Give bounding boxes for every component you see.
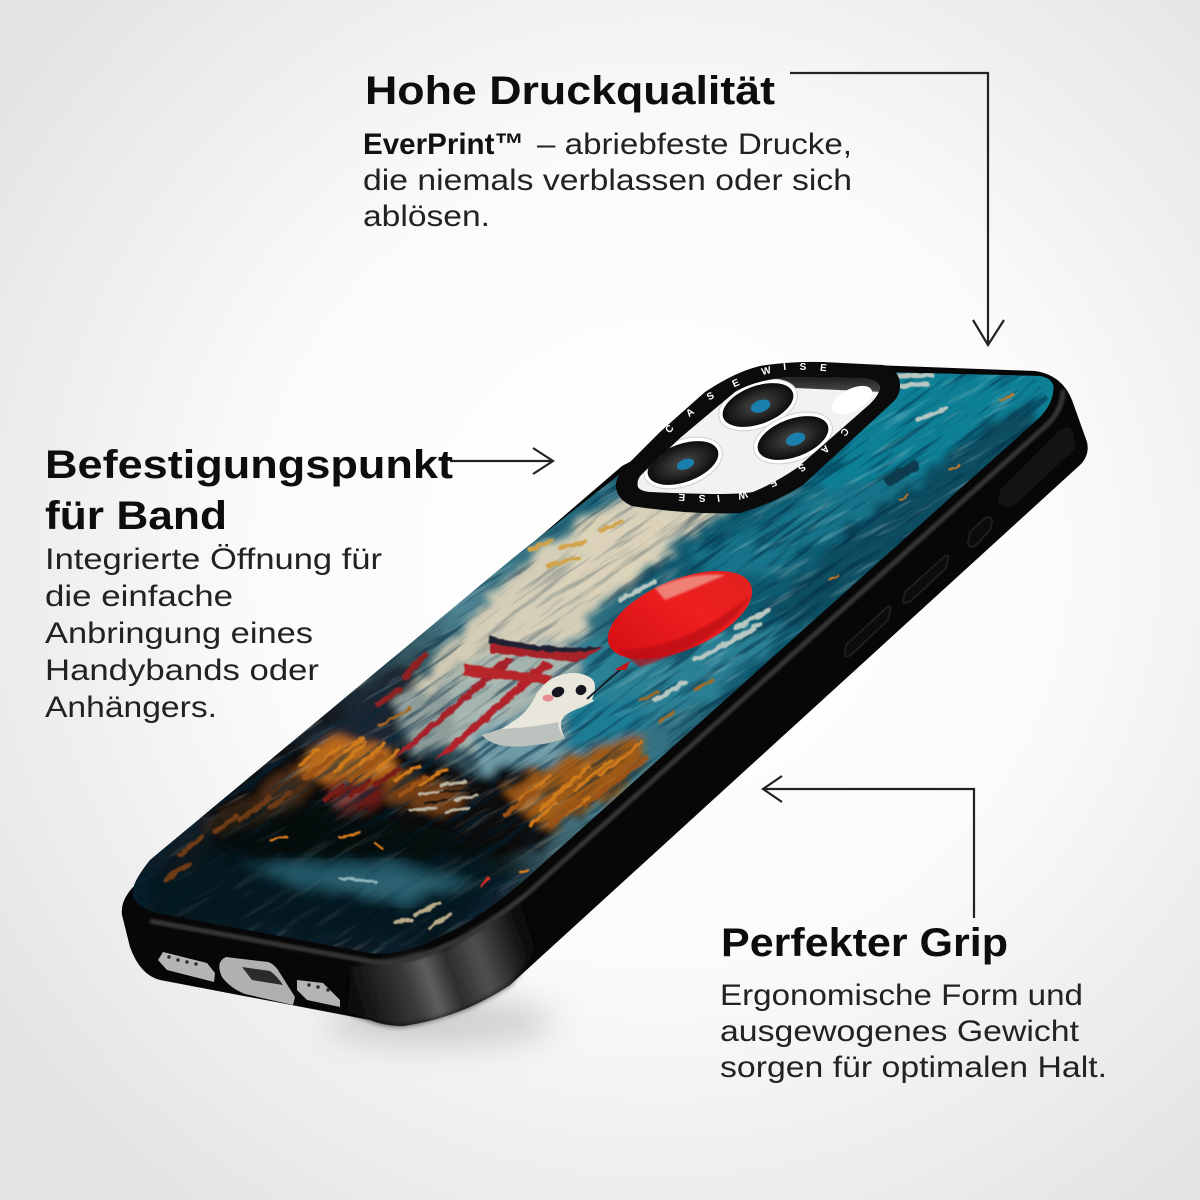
painting base <box>130 365 1060 960</box>
arrow: grip <box>763 776 974 918</box>
camera ring <box>616 362 900 513</box>
callout: print quality <box>363 69 852 233</box>
description: ablösen. <box>363 200 490 233</box>
phone case illustration <box>122 362 1088 1030</box>
ring lettering top: E <box>819 363 827 374</box>
heading <box>45 443 453 538</box>
ring lettering bottom: W <box>736 488 749 501</box>
inner wall shadow <box>766 377 880 392</box>
description: Ergonomische Form und <box>720 979 1083 1012</box>
torii pillars <box>394 657 515 757</box>
ghost <box>482 673 595 746</box>
torii top beam <box>490 636 604 662</box>
ring lettering top: I <box>783 362 787 373</box>
description: die einfache <box>45 580 233 613</box>
description: sorgen für optimalen Halt. <box>720 1051 1107 1084</box>
balloon <box>586 570 752 700</box>
description <box>45 543 382 724</box>
lens left <box>643 436 723 490</box>
camera bump <box>616 362 900 513</box>
ring lettering top: W <box>760 365 773 378</box>
description: Handybands oder <box>45 654 319 687</box>
painting colour fields <box>135 370 1060 950</box>
ring lettering top <box>664 362 827 436</box>
description: die niemals verblassen oder sich <box>363 164 852 197</box>
callout: strap attachment <box>45 443 453 724</box>
ring lettering top: S <box>705 390 717 403</box>
bottom ports <box>158 952 340 1007</box>
ring lettering bottom <box>678 425 851 503</box>
glossy bottom corner <box>347 900 535 1026</box>
description: ausgewogenes Gewicht <box>720 1015 1080 1048</box>
ring lettering bottom: A <box>818 442 831 455</box>
arrow: strap point <box>450 448 553 474</box>
ring lettering bottom: E <box>678 491 686 502</box>
speaker right <box>297 980 340 1007</box>
ghost eyes <box>552 686 564 698</box>
ring lettering top: E <box>731 377 742 390</box>
orange masses <box>285 738 400 790</box>
camera flash <box>832 386 872 414</box>
torii lower beam <box>463 664 552 684</box>
description <box>363 128 852 233</box>
side buttons <box>845 427 1076 657</box>
volume down <box>845 607 890 657</box>
ghost cheek <box>542 694 554 702</box>
case body <box>122 363 1088 1026</box>
action area <box>998 427 1076 507</box>
cream wash <box>440 490 700 680</box>
dark streak overlay <box>134 372 1049 953</box>
artwork <box>132 372 1054 954</box>
speckled patch and flecks <box>270 375 1014 928</box>
volume up <box>903 555 949 603</box>
ring lettering bottom: C <box>837 425 851 438</box>
heading: Befestigungspunkt <box>45 443 453 487</box>
torii gate <box>394 636 604 760</box>
ring lettering bottom: E <box>767 476 778 489</box>
ring lettering top: A <box>684 406 697 420</box>
description: Integrierte Öffnung für <box>45 543 382 576</box>
description: Anbringung eines <box>45 617 313 650</box>
heading: Perfekter Grip <box>721 921 1008 965</box>
camera glass and lenses <box>638 377 880 494</box>
arrow: print quality <box>790 73 1004 345</box>
bumper rim highlight <box>150 390 1063 962</box>
callout: grip <box>720 921 1107 1084</box>
dark lower wash <box>135 800 530 950</box>
description: Anhängers. <box>45 691 217 724</box>
ring lettering bottom: S <box>795 461 807 474</box>
mute button <box>968 517 992 547</box>
ring lettering top: C <box>664 423 677 436</box>
ring lettering bottom: S <box>698 492 706 503</box>
orange brush strokes <box>165 522 713 880</box>
ring lettering bottom: I <box>716 492 720 503</box>
light streak overlay <box>146 374 1042 954</box>
blue lower band <box>240 864 470 902</box>
description <box>720 979 1107 1084</box>
speaker left <box>158 952 215 982</box>
description: – abriebfeste Drucke, <box>537 128 852 161</box>
charging port <box>219 957 295 1005</box>
lens top <box>718 378 798 432</box>
lens right <box>753 412 833 464</box>
phone shadow <box>325 998 555 1046</box>
description: EverPrint™ <box>363 128 524 161</box>
ring lettering top: S <box>800 362 807 373</box>
heading: Hohe Druckqualität <box>365 69 775 113</box>
heading: für Band <box>45 494 227 538</box>
